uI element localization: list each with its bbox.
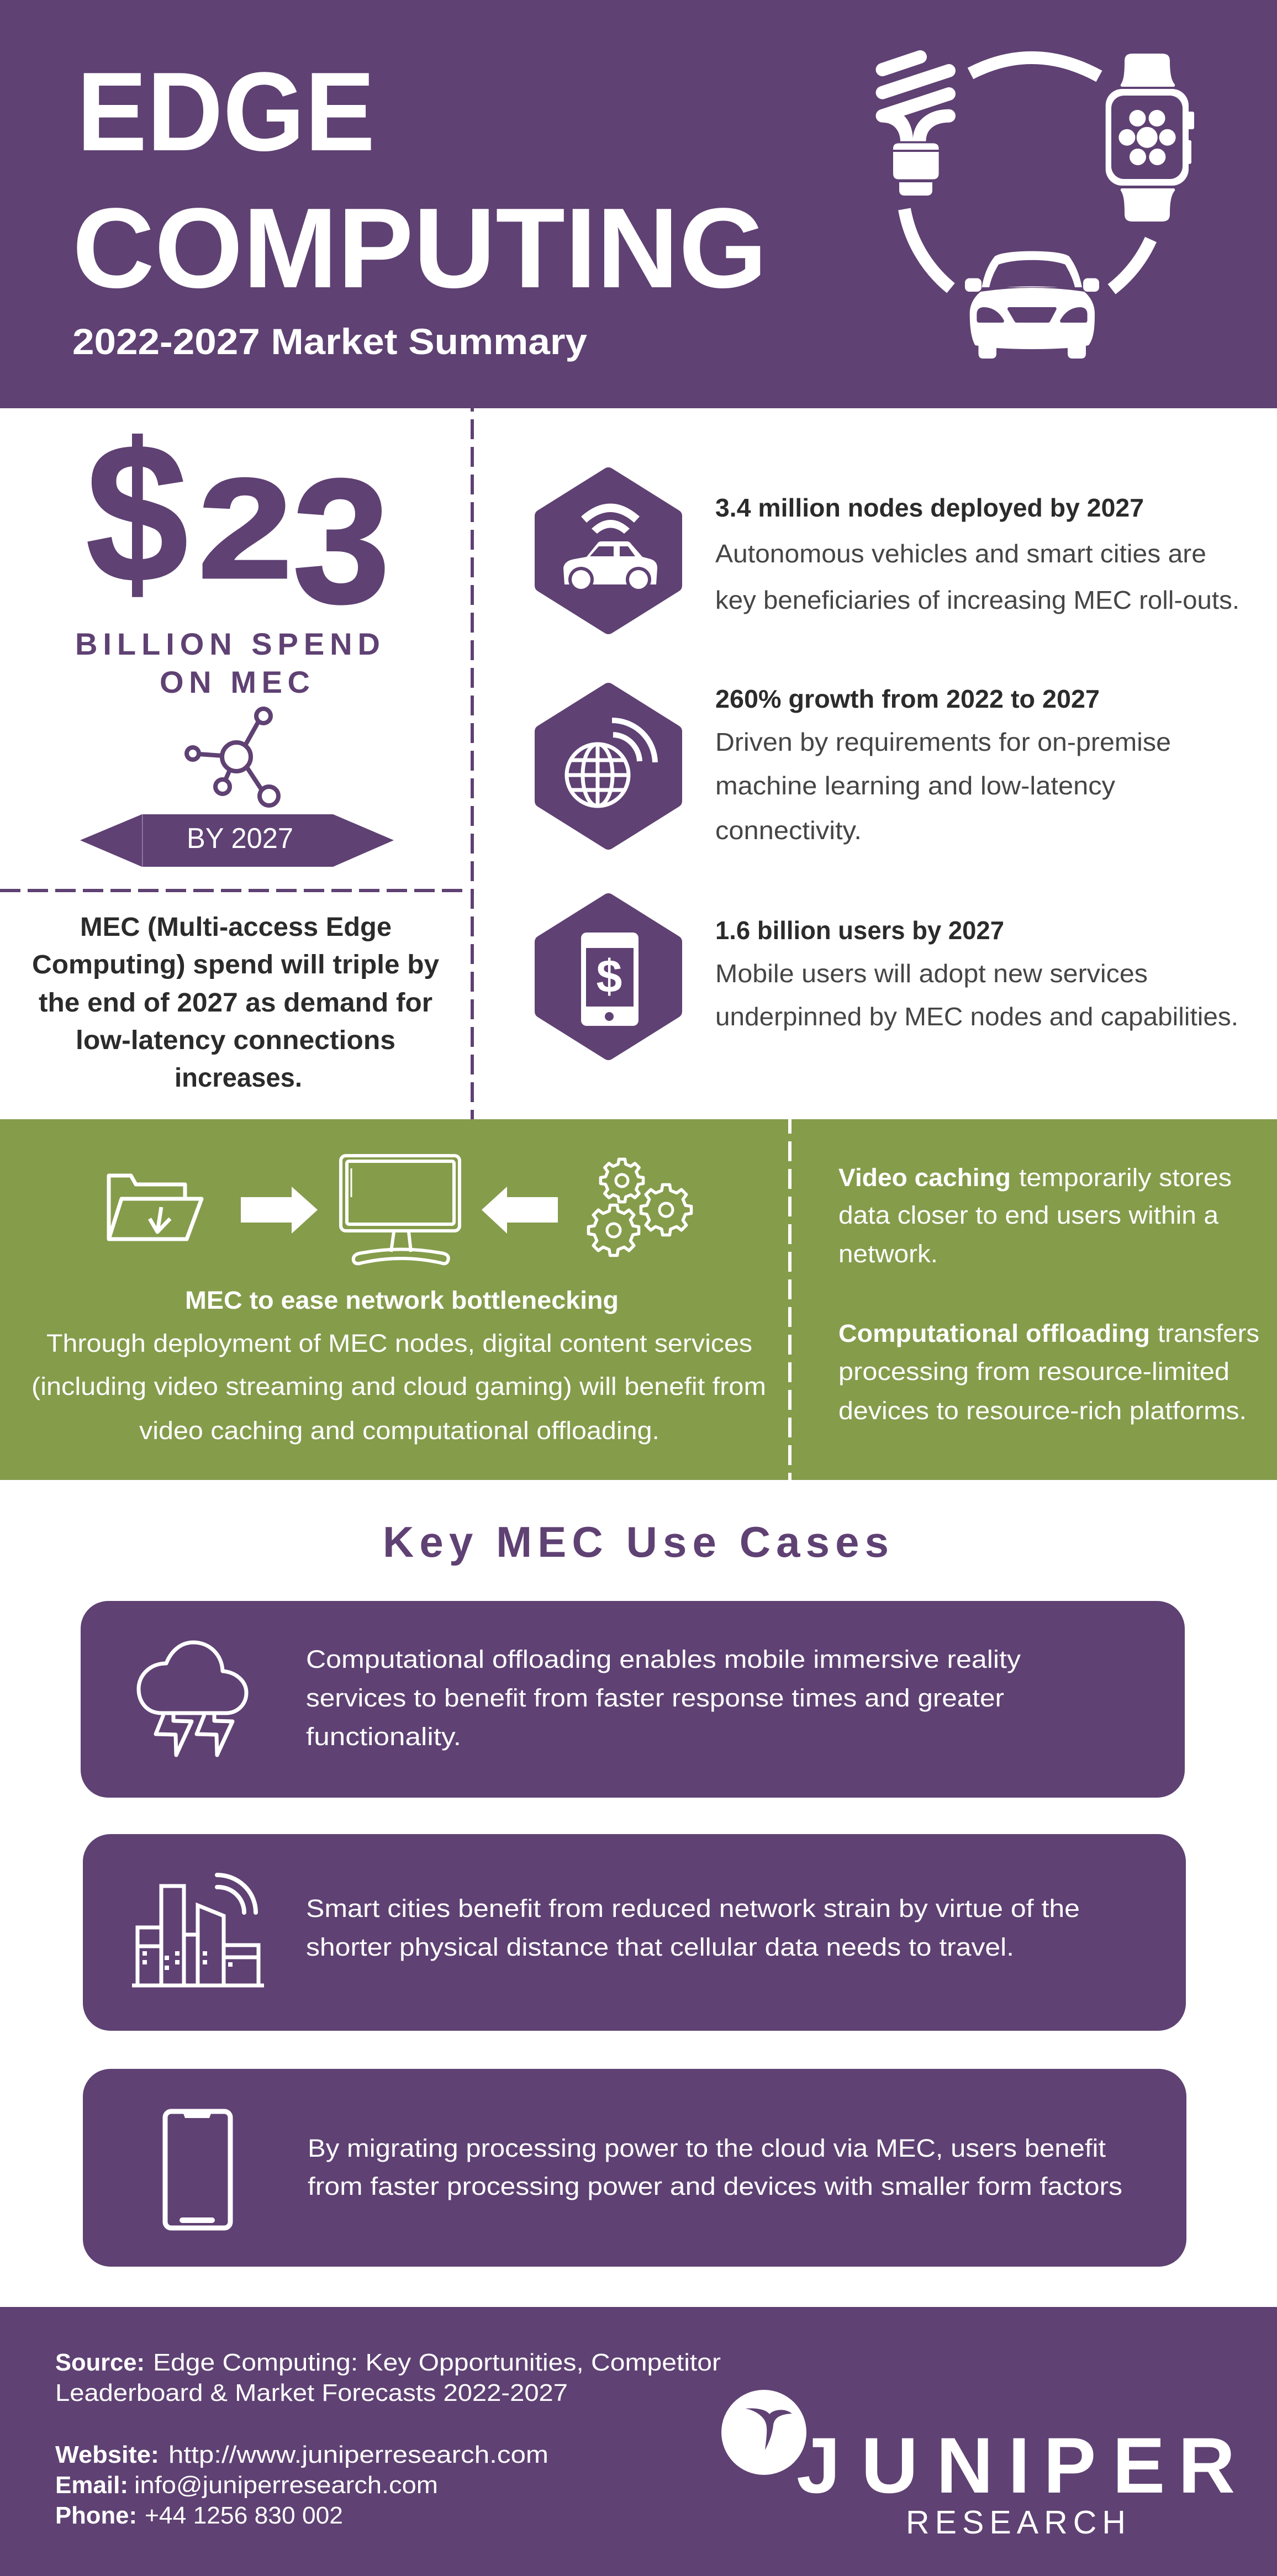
text: definitions: transfers [1158, 1319, 1259, 1347]
panel: use case cloud processing [83, 2069, 1186, 2267]
icon: hexagon mobile dollar: $ [597, 950, 622, 1002]
divider: vertical dashed [471, 408, 474, 1119]
text: definitions: data closer to end users within a [838, 1201, 1219, 1229]
text: source and contacts: Leaderboard & Market Forecasts 2022-2027 [55, 2379, 568, 2406]
icon: city with signal [132, 1875, 264, 1985]
text: card three: By migrating processing power to the cloud via MEC, users benefit [308, 2134, 1106, 2162]
icon: smartphone [165, 2111, 230, 2228]
arrow: left [482, 1187, 558, 1234]
text: card one [306, 1645, 1021, 1751]
title [72, 49, 767, 312]
text block: MEC summary: Computing) spend will triple by [32, 950, 439, 979]
text: growth: machine learning and low-latency [715, 771, 1115, 800]
text: source and contacts: Source: [55, 2349, 145, 2376]
icon: gears [588, 1159, 692, 1256]
spend label [75, 626, 380, 699]
panel: network bottlenecking [0, 1119, 1277, 1480]
logo: Juniper Research [721, 2390, 1235, 2541]
panel: stat nodes [541, 474, 1239, 1053]
text: definitions: devices to resource-rich platforms. [838, 1397, 1247, 1425]
icon: connection arcs [905, 57, 1151, 289]
text: card one: Computational offloading enables mobile immersive reality [306, 1645, 1021, 1673]
title: COMPUTING [72, 185, 767, 312]
icon: network nodes [187, 709, 278, 805]
text: growth: Driven by requirements for on-premise [715, 728, 1171, 756]
divider: horizontal dashed [0, 889, 465, 892]
text block: MEC summary: low-latency connections [76, 1026, 395, 1055]
text: card three [308, 2134, 1122, 2200]
spend label: ON MEC [160, 665, 310, 699]
panel: use case smart cities [83, 1834, 1186, 2031]
big number: 3 [293, 442, 390, 640]
text: source and contacts: Edge Computing: Key Opportunities, Competitor [153, 2349, 721, 2376]
text: users [715, 916, 1238, 1031]
text: card three: from faster processing power and devices with smaller form factors [308, 2172, 1122, 2200]
text: definitions: temporarily stores [1019, 1163, 1232, 1192]
text: definitions: processing from resource-limited [838, 1357, 1229, 1386]
text: MEC to ease network bottlenecking: (including video streaming and cloud gaming) will benefit from [31, 1372, 766, 1400]
text: users: 1.6 billion users by 2027 [715, 916, 1004, 945]
text: card two [306, 1894, 1080, 1961]
big number: 2 [198, 450, 292, 608]
text: card one: services to benefit from faster response times and greater [306, 1684, 1004, 1712]
icon: hexagon mobile dollar [541, 900, 676, 1053]
text: source and contacts: Website: [55, 2441, 159, 2468]
text: source and contacts: http://www.juniperresearch.com [168, 2441, 548, 2468]
text: source and contacts: Phone: [55, 2502, 137, 2529]
icon: hexagon connected car [541, 474, 676, 628]
big number: $ [86, 402, 188, 624]
logo: Juniper Research: JUNIPER [796, 2422, 1235, 2510]
panel: header [0, 0, 1277, 408]
text: source and contacts: +44 1256 830 002 [145, 2502, 343, 2529]
text block: MEC summary: the end of 2027 as demand for [39, 988, 432, 1018]
text: definitions [838, 1163, 1259, 1425]
text: users: underpinned by MEC nodes and capabilities. [715, 1002, 1238, 1031]
text: MEC to ease network bottlenecking [31, 1286, 766, 1445]
text: definitions: Computational offloading [838, 1319, 1150, 1347]
icon: smart watch [1106, 54, 1194, 222]
text: growth [715, 684, 1171, 845]
icon: storm cloud [139, 1642, 246, 1755]
text: nodes deployed: key beneficiaries of increasing MEC roll-outs. [715, 586, 1239, 614]
icon: folder [109, 1176, 202, 1239]
text: MEC to ease network bottlenecking: MEC to ease network bottlenecking [185, 1286, 619, 1314]
banner: BY 2027 [187, 823, 293, 855]
text: definitions: Video caching [838, 1163, 1011, 1192]
text block: MEC summary: increases. [175, 1063, 302, 1093]
spend label: BILLION SPEND [75, 626, 380, 661]
text: nodes deployed: 3.4 million nodes deployed by 2027 [715, 493, 1144, 522]
panel: footer [0, 2307, 1277, 2576]
arrow: right [241, 1187, 318, 1234]
text: growth: 260% growth from 2022 to 2027 [715, 684, 1100, 713]
text: MEC to ease network bottlenecking: Through deployment of MEC nodes, digital content services [46, 1329, 752, 1357]
text: source and contacts: Email: [55, 2472, 128, 2499]
logo: Juniper Research: RESEARCH [906, 2504, 1126, 2541]
panel: use case immersive reality [81, 1601, 1185, 1798]
text: card two: shorter physical distance that cellular data needs to travel. [306, 1933, 1014, 1961]
text block: MEC summary [32, 913, 439, 1093]
text: card two: Smart cities benefit from reduced network strain by virtue of the [306, 1894, 1080, 1922]
text: definitions: network. [838, 1240, 938, 1268]
text: source and contacts [55, 2349, 721, 2529]
panel: headline spend stat [75, 402, 394, 867]
text block: MEC summary: MEC (Multi-access Edge [80, 913, 392, 942]
heading: key use cases: Key MEC Use Cases [383, 1518, 889, 1566]
icon: monitor [341, 1156, 460, 1263]
text: growth: connectivity. [715, 816, 862, 845]
text: users: Mobile users will adopt new services [715, 959, 1148, 988]
banner [80, 814, 394, 867]
subtitle: 2022-2027 Market Summary [72, 321, 587, 362]
text: nodes deployed [715, 493, 1239, 614]
icon: car front [965, 251, 1099, 359]
title: EDGE [77, 49, 375, 175]
text: card one: functionality. [306, 1722, 461, 1751]
icon: hexagon globe [541, 689, 676, 843]
big number [86, 402, 390, 640]
icon: light bulb [883, 57, 956, 196]
text: MEC to ease network bottlenecking: video caching and computational offloading. [139, 1416, 659, 1445]
text: nodes deployed: Autonomous vehicles and smart cities are [715, 539, 1206, 568]
text: source and contacts: info@juniperresearch.com [134, 2472, 438, 2499]
